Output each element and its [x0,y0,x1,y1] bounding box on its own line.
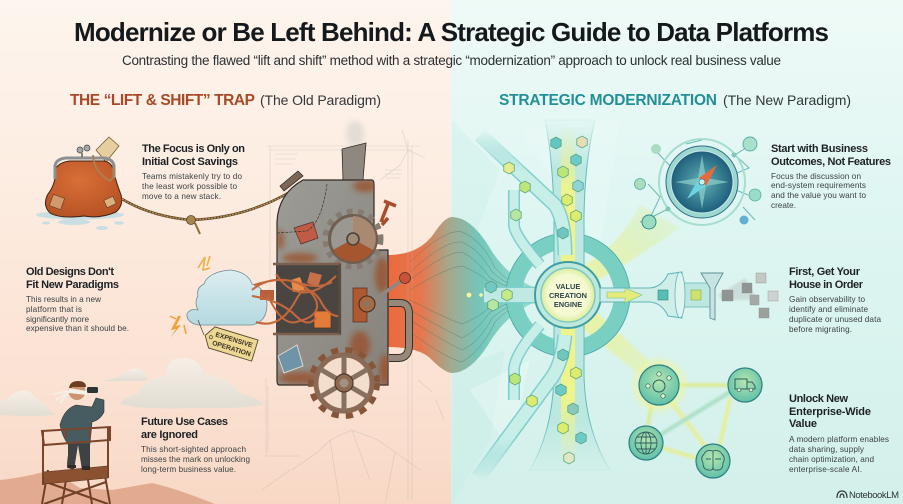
text: old designs [26,266,129,333]
text: future use cases: are Ignored [141,429,198,441]
hub label [549,282,587,309]
transition wave of data lines [388,217,535,373]
main pipe [600,272,682,318]
rope from purse to machine [122,192,290,234]
heading: lift and shift trap: THE “LIFT & SHIFT” TRAP [70,92,255,109]
icon: rusty patched machine [252,121,410,415]
text: business outcomes: Outcomes, Not Features [771,156,891,168]
icon: blindfolded man on lookout tower [42,381,110,504]
tag: expensive operation [202,325,258,361]
text: business outcomes: end-system requirements [771,181,866,190]
text: focus on cost savings: move to a new stack. [142,192,221,201]
text: house in order: before migrating. [789,325,852,334]
text: house in order: identify and eliminate [789,305,868,314]
upper gear [326,212,380,266]
background: new paradigm side [451,0,903,504]
text: old designs: expensive than it should be. [26,324,129,333]
vertical pipes [530,120,610,470]
hub label: CREATION [549,291,587,300]
tag: expensive operation: OPERATION [211,340,251,358]
icon: enterprise value network [629,359,762,478]
data squares in pipe [658,290,668,300]
smoke [346,121,364,147]
node: brain [696,444,730,478]
side pipe [389,303,409,358]
boiler body [277,180,388,385]
text: old designs: significantly more [26,315,89,324]
title: Modernize or Be Left Behind: A Strategic Guide to Data Platforms [74,17,829,47]
text: old designs: platform that is [26,305,82,314]
seam [277,184,327,233]
data hexagons [486,136,587,464]
lever and joint [353,288,367,322]
cap [280,171,303,191]
text: enterprise-wide value: Value [789,418,817,430]
subtitle: Contrasting the flawed “lift and shift” method with a strategic “modernization” approach to unlock real business value [122,53,781,68]
background: old paradigm side [0,0,452,504]
blueprint and cracks behind machine [262,130,444,504]
text: future use cases: Future Use Cases [141,416,228,428]
icon: storm cloud [170,270,267,338]
heading: strategic modernization: (The New Paradigm) [723,92,851,108]
text: focus on cost savings: Teams mistakenly try to do [142,172,242,181]
rust patches [276,180,391,386]
text: enterprise-wide value: enterprise-scale AI. [789,465,862,474]
chimney [342,143,366,180]
logo: NotebookLM: NotebookLM [849,490,899,501]
heading: lift and shift trap [70,92,381,109]
text: old designs: Fit New Paradigms [26,279,119,291]
text: focus on cost savings: the least work possible to [142,182,237,191]
connections [648,385,730,458]
text: business outcomes: Start with Business [771,143,868,155]
crank valve [381,201,396,225]
heading: strategic modernization [499,92,851,109]
grey spray [718,278,758,300]
icon: filter pipe with data cleansing [600,272,778,320]
text: future use cases [141,416,250,474]
hub label: ENGINE [554,300,582,309]
funnel [701,273,723,320]
text: future use cases: long-term business value. [141,465,236,474]
hub circle [535,262,601,328]
text: old designs: This results in a new [26,295,101,304]
heading: strategic modernization: STRATEGIC MODERNIZATION [499,92,717,109]
text: future use cases: misses the mark on unlocking [141,455,250,464]
tag: expensive operation: EXPENSIVE [214,332,254,350]
text: business outcomes: and the value you want to [771,191,866,200]
text: enterprise-wide value: Enterprise-Wide [789,406,871,418]
node: globe [629,426,663,460]
text: house in order [789,266,881,334]
node: truck [728,368,762,402]
side branches [466,135,568,478]
patch red [294,222,318,244]
text: enterprise-wide value: data sharing, supply [789,445,865,454]
text: house in order: duplicate or unused data [789,315,881,324]
text: focus on cost savings: Initial Cost Savings [142,156,238,168]
text: business outcomes [771,143,891,210]
panel: lift and shift trap [0,92,444,504]
text: house in order: Gain observability to [789,295,865,304]
text: business outcomes: create. [771,201,796,210]
text: enterprise-wide value [789,393,889,474]
clouds and hills [0,358,264,504]
arrow in pipe [607,288,642,303]
text: enterprise-wide value: A modern platform enables [789,435,889,444]
value creation hub with pipes [466,120,680,478]
lower gear [312,351,376,415]
glow [633,359,685,411]
icon: spark above cloud [198,256,210,270]
text: enterprise-wide value: Unlock New [789,393,848,405]
node: collaboration [639,365,679,405]
duplicate data squares [722,273,778,318]
hub label: VALUE [556,282,580,291]
icon: compass with network nodes [634,137,761,229]
text: business outcomes: Focus the discussion on [771,172,861,181]
text: house in order: House in Order [789,279,864,291]
text: enterprise-wide value: chain optimization, and [789,455,874,464]
panel: strategic modernization [466,92,891,478]
text: focus on cost savings [142,143,245,201]
teal ring [514,241,622,349]
dark window with tangled wires [276,265,339,334]
text: focus on cost savings: The Focus is Only on [142,143,245,155]
heading: lift and shift trap: (The Old Paradigm) [260,92,381,108]
glow rays [580,205,680,282]
glowing data dots [467,293,483,297]
blue patch [278,345,303,373]
icon: leaking coin purse [36,137,124,230]
text: old designs: Old Designs Don't [26,266,114,278]
text: future use cases: This short-sighted approach [141,445,246,454]
text: house in order: First, Get Your [789,266,861,278]
